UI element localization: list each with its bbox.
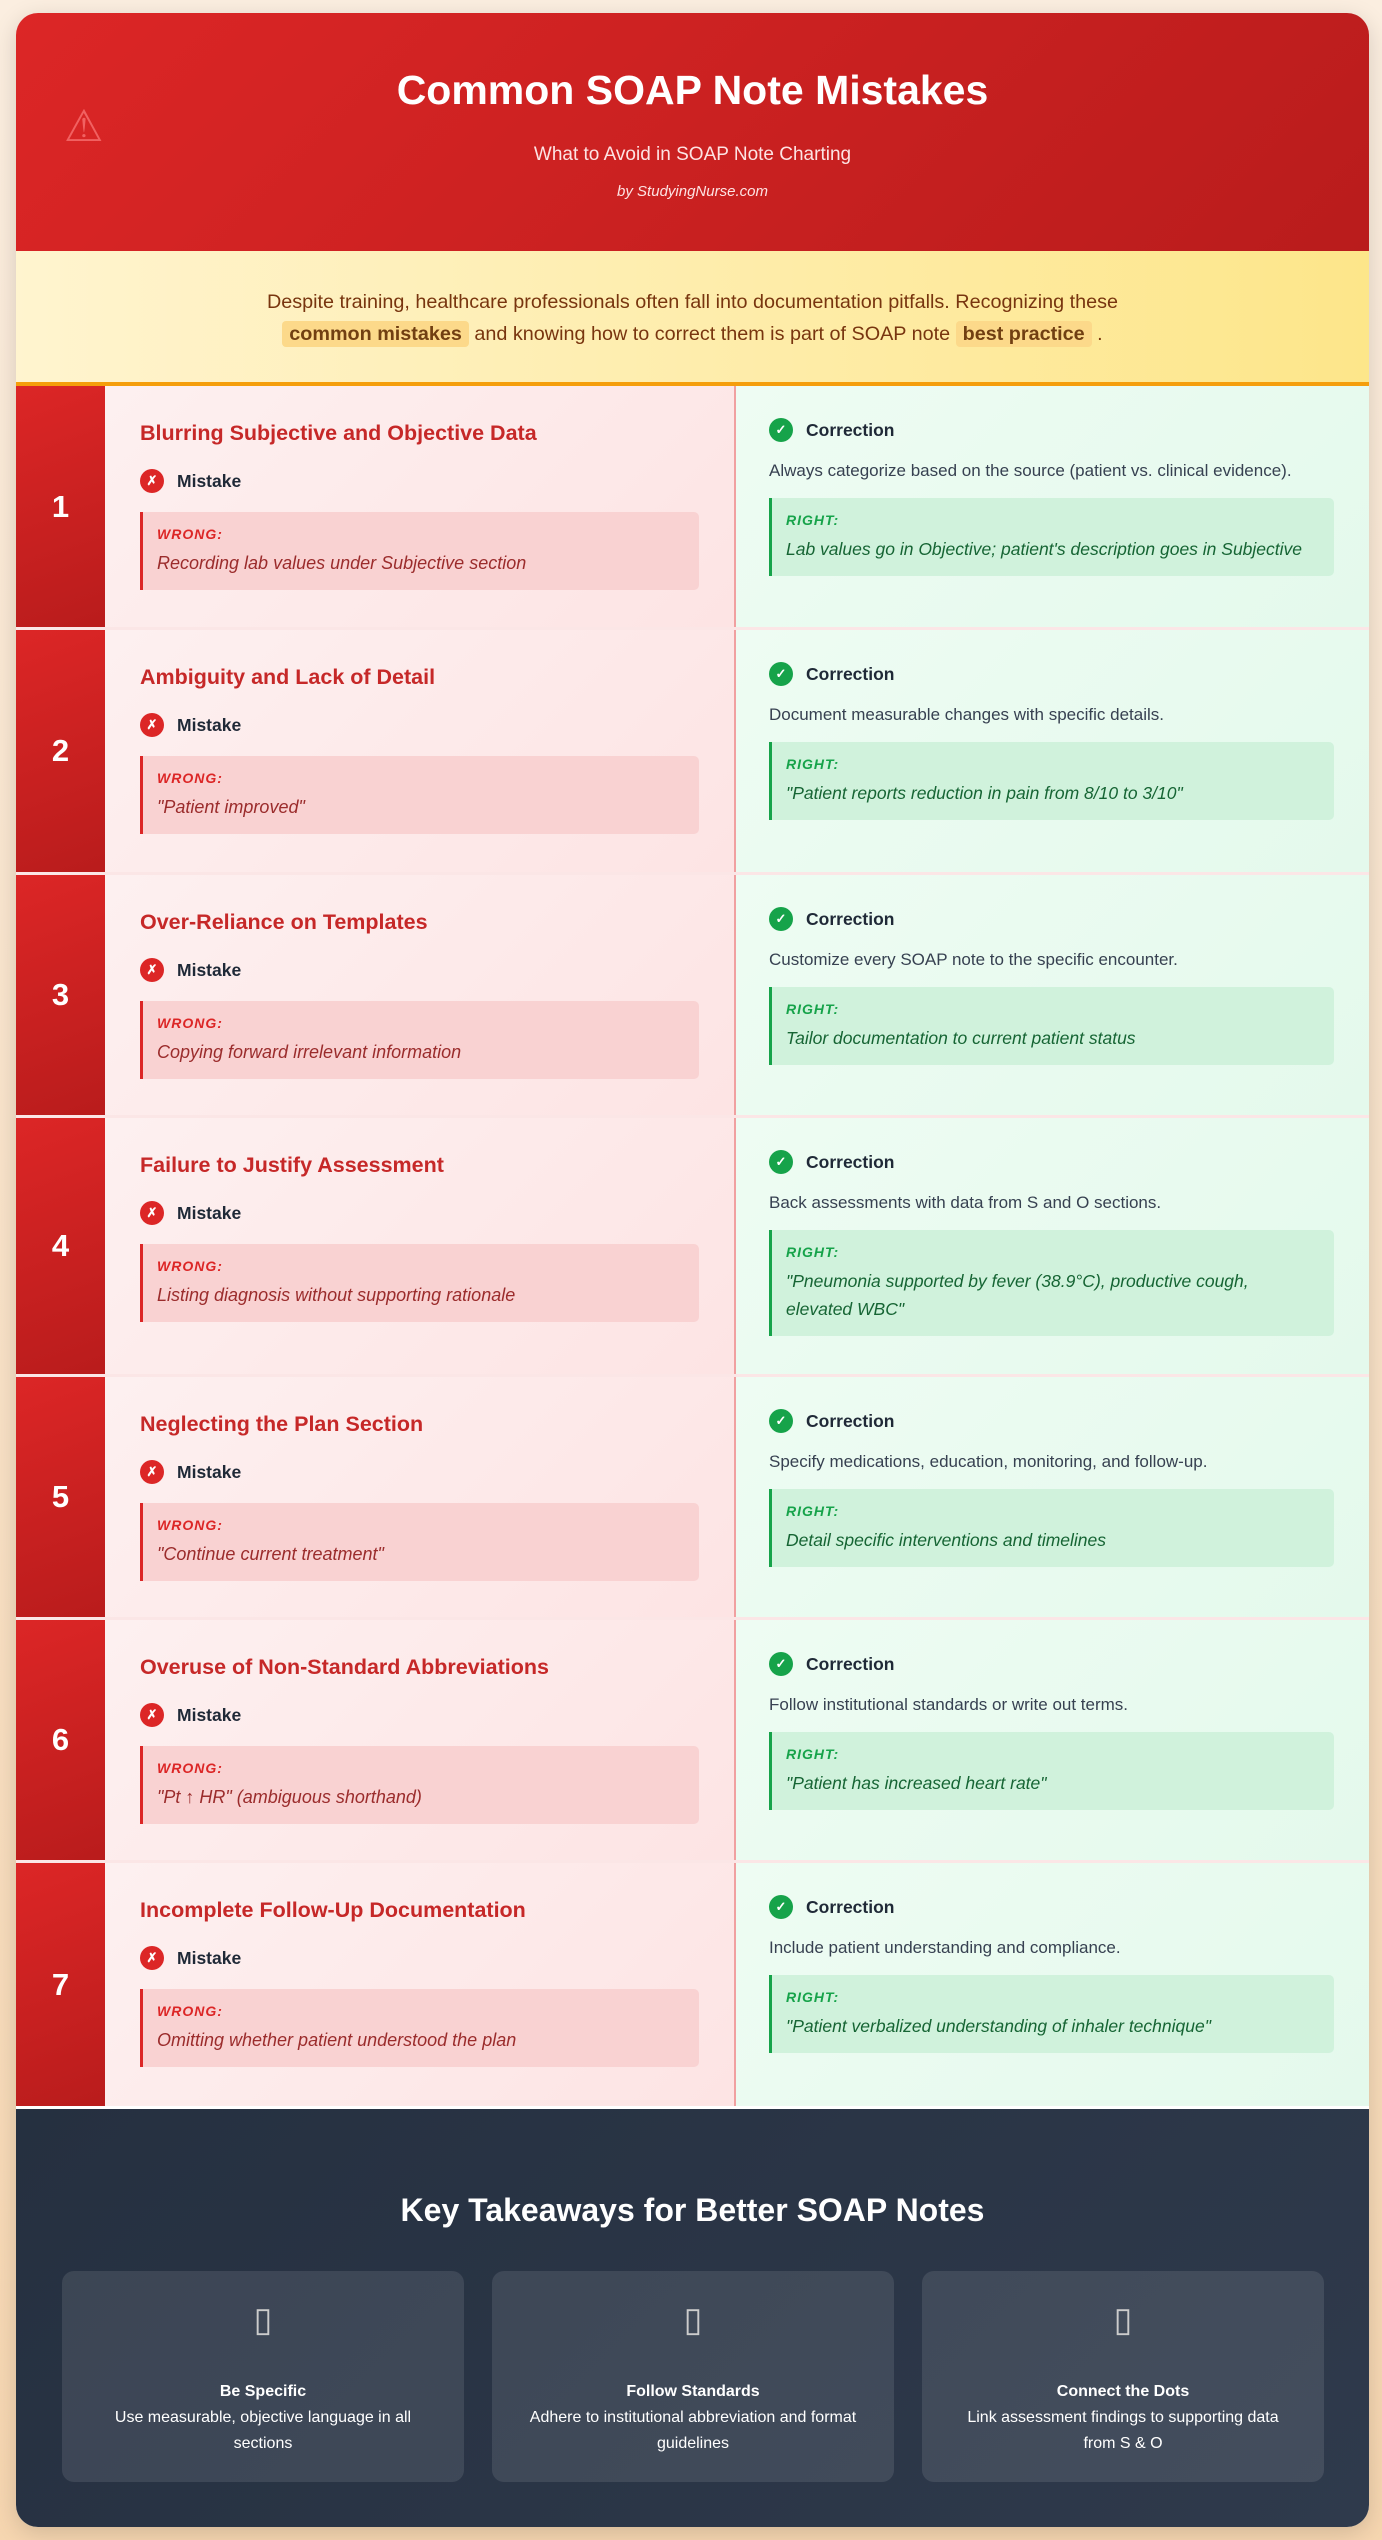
correction panel 7: RIGHT: [786, 1989, 839, 2005]
correction panel 3: Tailor documentation to current patient status [786, 1028, 1136, 1048]
row 2: 2 [52, 733, 69, 768]
mistake panel 2: WRONG: [157, 770, 223, 786]
correction panel 5 [736, 1377, 1369, 1617]
correction panel 4: Back assessments with data from S and O sections. [769, 1193, 1161, 1212]
card: be specific: ▯ [254, 2301, 272, 2339]
row 5 [16, 1374, 1369, 1617]
correction panel 4: RIGHT: [786, 1244, 839, 1260]
card: be specific: sections [234, 2435, 292, 2452]
mistake panel 4 [105, 1118, 736, 1374]
row 5: 5 [52, 1479, 69, 1514]
correction panel 1 [736, 386, 1369, 627]
correction panel 4 [736, 1118, 1369, 1374]
correction panel 4: Correction [806, 1152, 894, 1172]
card: be specific: Use measurable, objective language in all [115, 2409, 411, 2426]
mistake panel 5: ✗ [147, 1464, 157, 1479]
correction panel 1: RIGHT: [786, 512, 839, 528]
correction panel 7: Include patient understanding and compliance. [769, 1938, 1121, 1957]
correction panel 2 [736, 630, 1369, 872]
correction panel 3: Customize every SOAP note to the specific encounter. [769, 950, 1178, 969]
mistake panel 7: Mistake [177, 1948, 241, 1968]
correction panel 2: Correction [806, 664, 894, 684]
card: be specific [62, 2271, 464, 2482]
mistake panel 6: ✗ [147, 1707, 157, 1722]
mistake panel 5: WRONG: [157, 1517, 223, 1533]
row 1 [16, 386, 1369, 627]
correction panel 5: ✓ [776, 1413, 786, 1428]
correction panel 6: "Patient has increased heart rate" [786, 1773, 1046, 1793]
row 4 [16, 1115, 1369, 1374]
byline: by StudyingNurse.com [617, 183, 768, 200]
intro text: Despite training, healthcare professionals often fall into documentation pitfalls. Recognizing these [267, 291, 1118, 313]
mistake panel 1: ✗ [147, 473, 157, 488]
mistake panel 4: Listing diagnosis without supporting rationale [157, 1285, 515, 1305]
title: Common SOAP Note Mistakes [397, 67, 988, 113]
card: connect the dots [922, 2271, 1324, 2482]
correction panel 3: Correction [806, 908, 894, 928]
mistake panel 1: WRONG: [157, 526, 223, 542]
correction panel 1: Always categorize based on the source (patient vs. clinical evidence). [769, 461, 1292, 480]
subtitle: What to Avoid in SOAP Note Charting [534, 144, 851, 165]
footer title: Key Takeaways for Better SOAP Notes [401, 2192, 984, 2228]
correction panel 7: "Patient verbalized understanding of inhaler technique" [786, 2016, 1211, 2036]
footer: key takeaways [16, 2109, 1369, 2527]
mistake panel 3: Mistake [177, 960, 241, 980]
mistake panel 4: ✗ [147, 1205, 157, 1220]
card: connect the dots: ▯ [1114, 2301, 1132, 2339]
mistake panel 6: Overuse of Non-Standard Abbreviations [140, 1655, 549, 1679]
correction panel 6: Follow institutional standards or write out terms. [769, 1695, 1128, 1714]
card: follow standards: guidelines [657, 2435, 729, 2452]
correction panel 6 [736, 1620, 1369, 1860]
correction panel 7 [736, 1863, 1369, 2106]
mistake panel 2: Mistake [177, 714, 241, 734]
mistake panel 2: Ambiguity and Lack of Detail [140, 665, 435, 689]
mistake panel 7: Incomplete Follow-Up Documentation [140, 1898, 526, 1922]
correction panel 1: Lab values go in Objective; patient's description goes in Subjective [786, 539, 1302, 559]
card: be specific: Be Specific [220, 2383, 306, 2400]
mistake panel 5: Neglecting the Plan Section [140, 1412, 423, 1436]
mistake panel 7: Omitting whether patient understood the plan [157, 2030, 516, 2050]
correction panel 5: Detail specific interventions and timelines [786, 1530, 1106, 1550]
correction panel 5: Correction [806, 1410, 894, 1430]
mistake panel 7 [105, 1863, 736, 2106]
correction panel 5: RIGHT: [786, 1503, 839, 1519]
correction panel 2: RIGHT: [786, 756, 839, 772]
mistake panel 6: Mistake [177, 1704, 241, 1724]
mistake panel 5 [105, 1377, 736, 1617]
icon: warning: ⚠ [64, 102, 103, 151]
correction panel 6: ✓ [776, 1656, 786, 1671]
mistake panel 7: ✗ [147, 1950, 157, 1965]
mistake panel 3: Copying forward irrelevant information [157, 1042, 461, 1062]
correction panel 6: RIGHT: [786, 1746, 839, 1762]
card: follow standards: Adhere to institutional abbreviation and format [530, 2409, 856, 2426]
mistake panel 4: Mistake [177, 1202, 241, 1222]
row 1: 1 [52, 488, 69, 524]
correction panel 6: Correction [806, 1654, 894, 1674]
correction panel 4: "Pneumonia supported by fever (38.9°C), productive cough, [786, 1271, 1249, 1291]
correction panel 2: Document measurable changes with specific details. [769, 705, 1164, 724]
mistake panel 2 [105, 630, 736, 872]
card: follow standards: Follow Standards [626, 2383, 760, 2400]
mistake panel 6: "Pt ↑ HR" (ambiguous shorthand) [157, 1787, 422, 1807]
mistake panel 1 [105, 386, 736, 627]
mistake panel 3: WRONG: [157, 1015, 223, 1031]
row 6: 6 [52, 1722, 69, 1757]
card: connect the dots: Link assessment findings to supporting data [967, 2409, 1279, 2426]
card: follow standards: ▯ [684, 2301, 702, 2339]
correction panel 7: ✓ [776, 1899, 786, 1914]
mistake panel 5: "Continue current treatment" [157, 1544, 384, 1564]
row 4: 4 [52, 1228, 69, 1263]
row 6 [16, 1617, 1369, 1860]
mistake panel 6: WRONG: [157, 1760, 223, 1776]
correction panel 1: ✓ [776, 422, 786, 437]
correction panel 4: ✓ [776, 1154, 786, 1169]
row 2 [16, 627, 1369, 872]
mistake panel 3 [105, 875, 736, 1115]
correction panel 2: ✓ [776, 666, 786, 681]
mistake panel 1: Mistake [177, 470, 241, 490]
correction panel 3: ✓ [776, 911, 786, 926]
mistake panel 7: WRONG: [157, 2003, 223, 2019]
correction panel 3: RIGHT: [786, 1001, 839, 1017]
card: connect the dots: from S & O [1083, 2435, 1163, 2452]
row 7 [16, 1860, 1369, 2106]
mistake panel 3: Over-Reliance on Templates [140, 910, 428, 934]
mistake panel 1: Blurring Subjective and Objective Data [140, 421, 537, 445]
mistake panel 1: Recording lab values under Subjective section [157, 553, 526, 573]
correction panel 5: Specify medications, education, monitoring, and follow-up. [769, 1452, 1207, 1471]
row 7: 7 [52, 1966, 69, 2002]
card: follow standards [492, 2271, 894, 2482]
correction panel 4: elevated WBC" [786, 1299, 904, 1319]
intro text [16, 251, 1369, 386]
header [16, 13, 1369, 251]
mistake panel 5: Mistake [177, 1462, 241, 1482]
mistake panel 2: ✗ [147, 717, 157, 732]
intro text: common mistakes and knowing how to correct them is part of SOAP note best practice . [289, 323, 1103, 345]
correction panel 1: Correction [806, 420, 894, 440]
row 3 [16, 872, 1369, 1115]
correction panel 3 [736, 875, 1369, 1115]
mistake panel 2: "Patient improved" [157, 797, 305, 817]
mistake panel 6 [105, 1620, 736, 1860]
row 3: 3 [52, 977, 69, 1012]
mistake panel 3: ✗ [147, 962, 157, 977]
correction panel 2: "Patient reports reduction in pain from 8/10 to 3/10" [786, 783, 1183, 803]
correction panel 7: Correction [806, 1896, 894, 1916]
card: connect the dots: Connect the Dots [1057, 2383, 1189, 2400]
mistake panel 4: Failure to Justify Assessment [140, 1153, 444, 1177]
mistake panel 4: WRONG: [157, 1258, 223, 1274]
